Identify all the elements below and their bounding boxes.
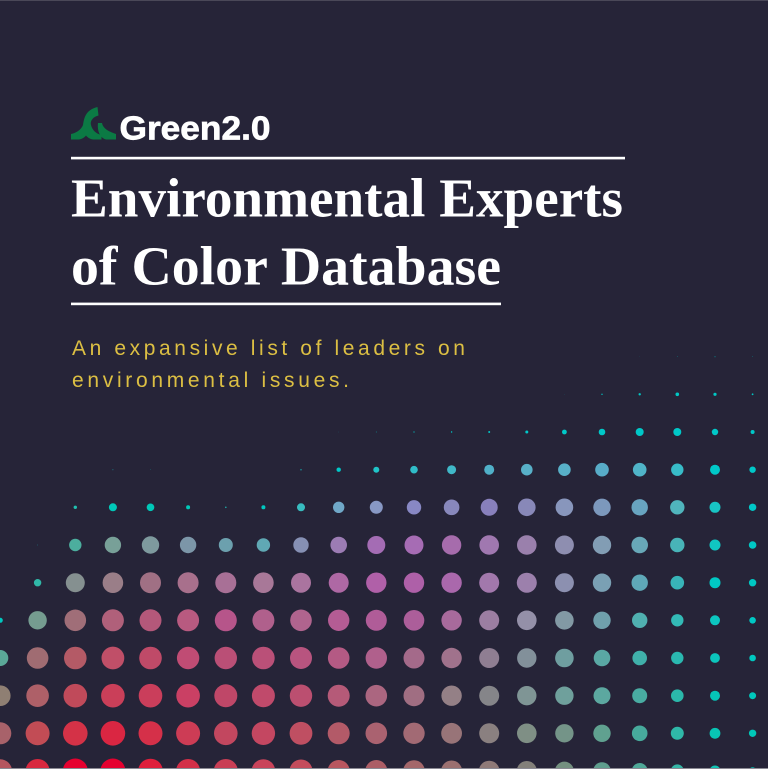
subtitle: environmental issues. (72, 369, 349, 392)
halftone dot field (0, 356, 756, 769)
title: of Color Database (71, 236, 501, 296)
title (71, 168, 623, 296)
top rule (71, 157, 625, 159)
subtitle: An expansive list of leaders on (72, 337, 465, 360)
title: Environmental Experts (71, 168, 623, 228)
bottom rule (71, 303, 501, 305)
logo: Green2.0 (71, 107, 270, 146)
logo wordmark: Green2.0 (120, 110, 270, 146)
icon: green leaf mark (71, 107, 116, 140)
subtitle (72, 337, 465, 392)
